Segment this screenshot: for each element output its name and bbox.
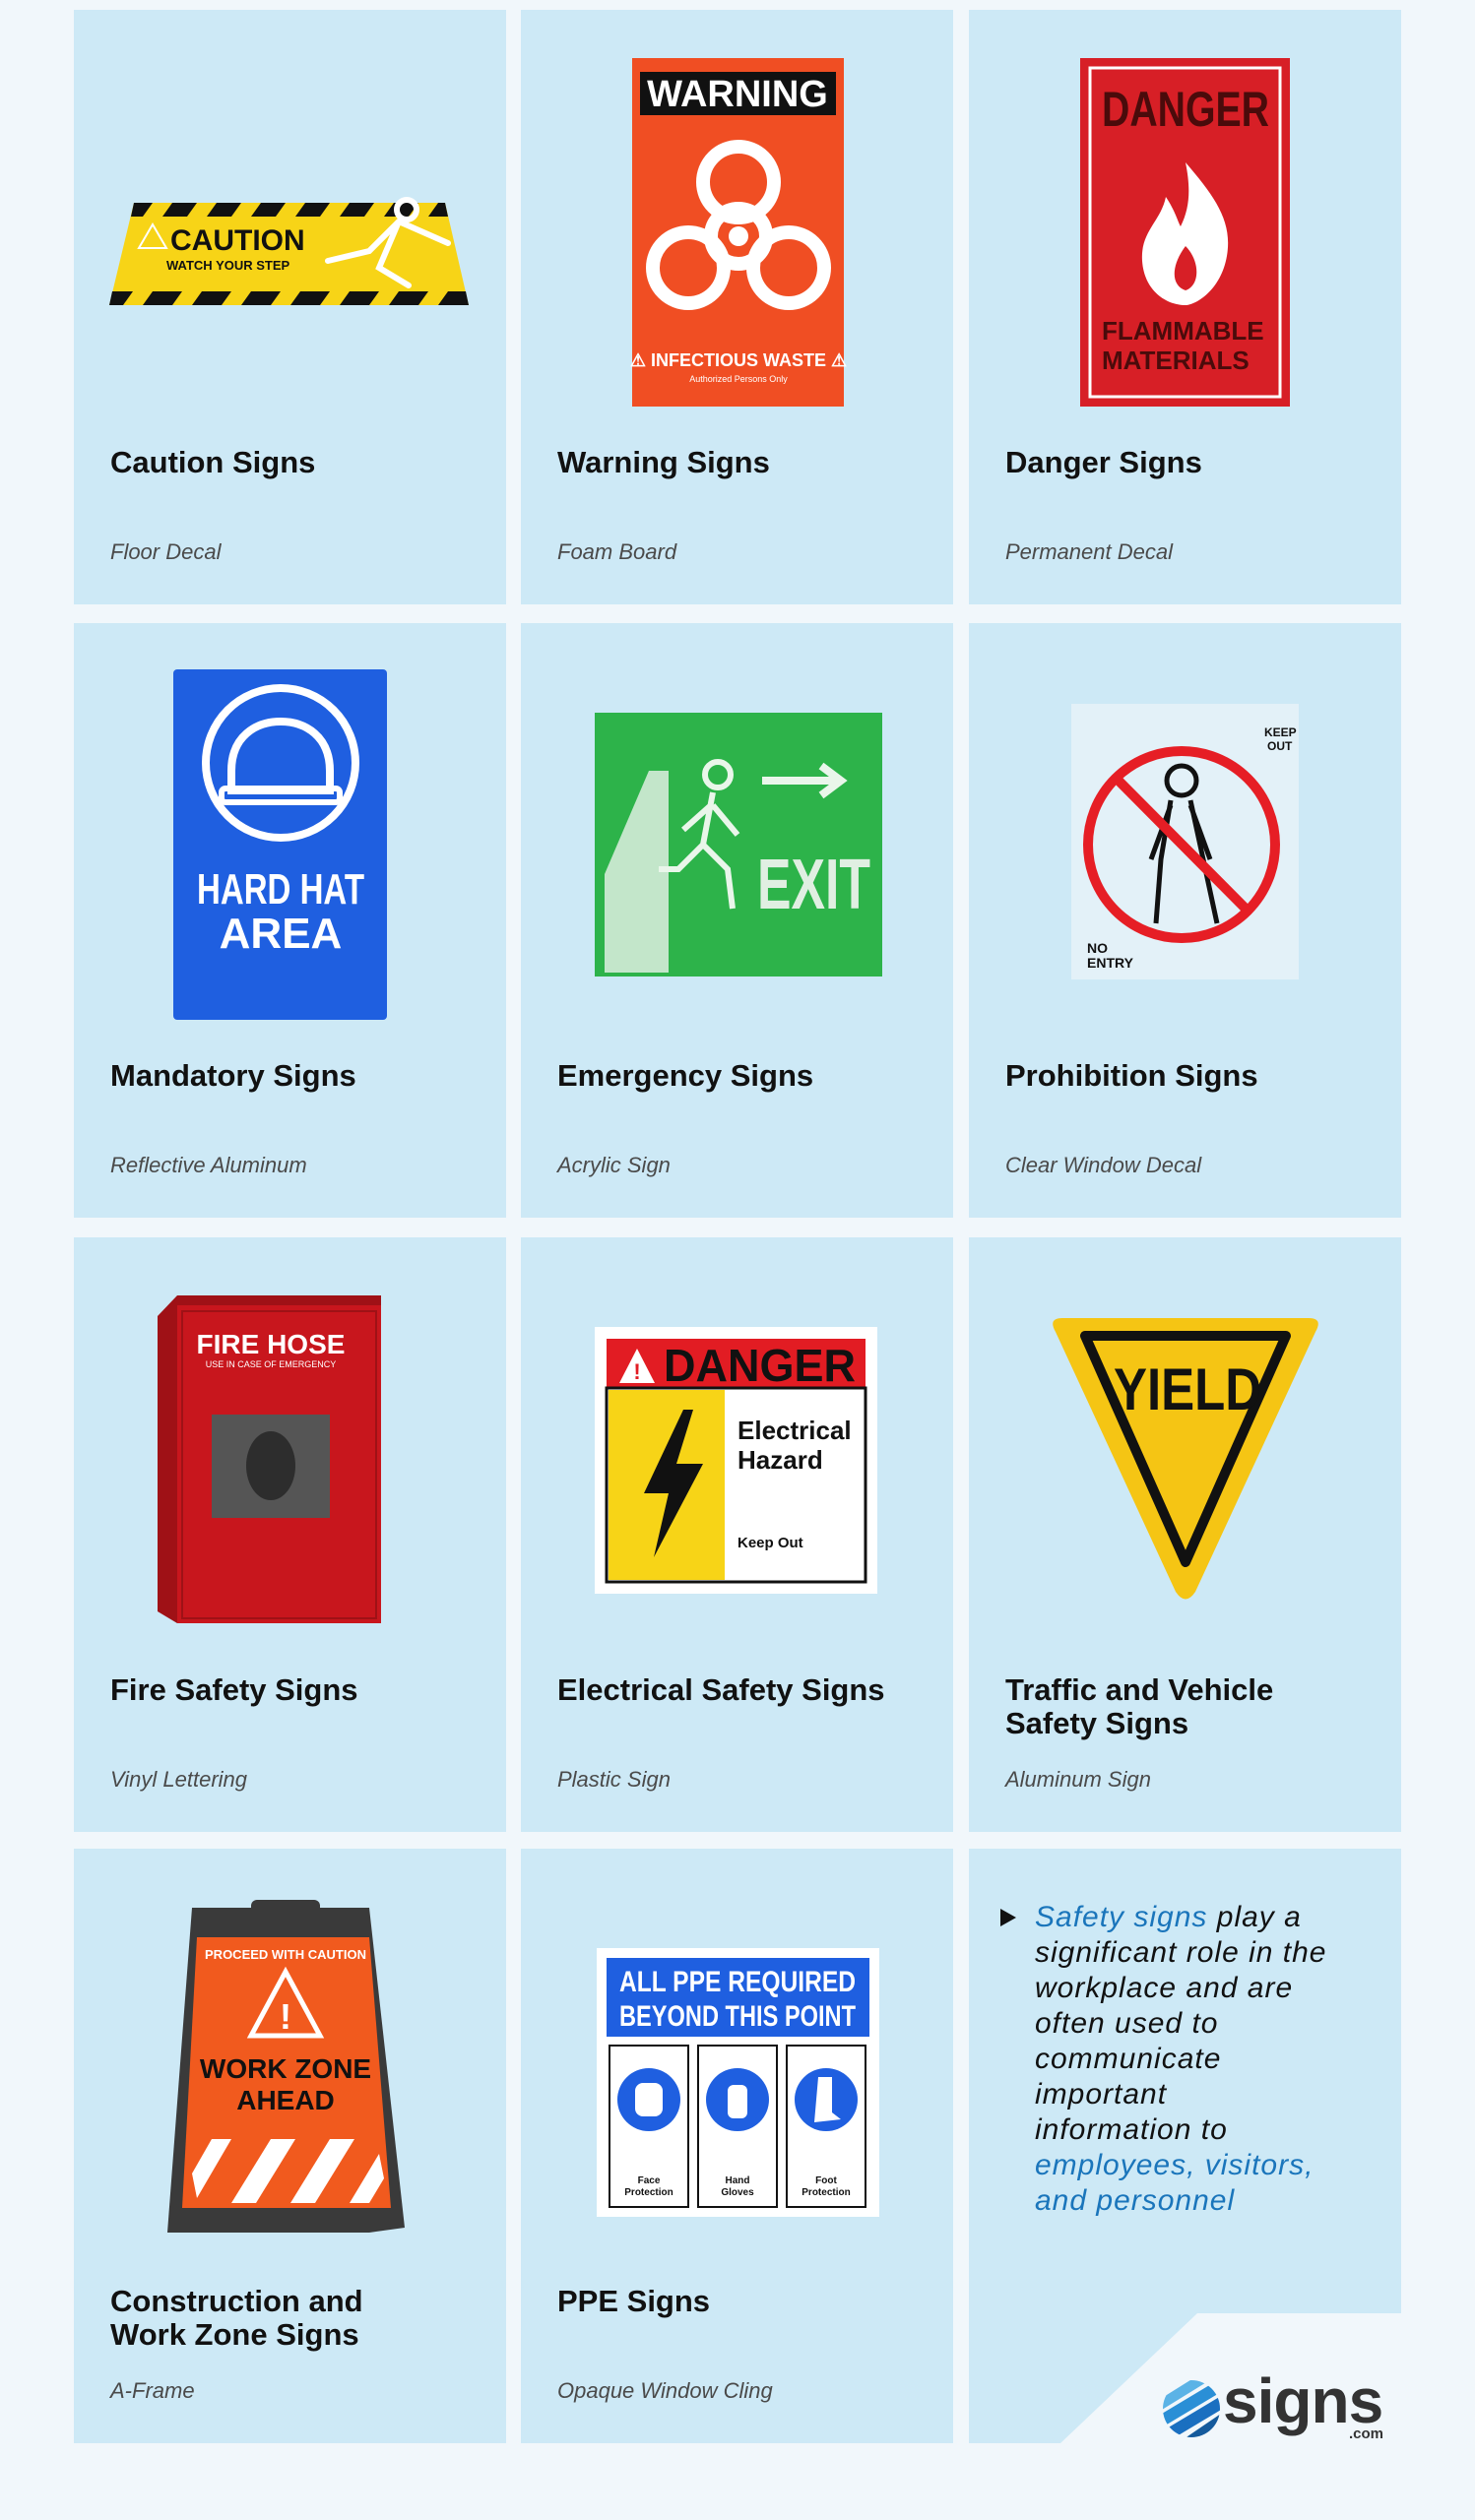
image: hard hat sign: AREA: [220, 910, 342, 958]
image: caution floor decal: WATCH YOUR STEP: [166, 258, 290, 273]
image: danger permanent decal: [1080, 58, 1290, 407]
title: Danger Signs: [1005, 445, 1202, 479]
image: no entry clear decal: OUT: [1267, 739, 1293, 753]
subtitle: Vinyl Lettering: [110, 1767, 247, 1792]
subtitle: Foam Board: [557, 539, 676, 564]
title: Fire Safety Signs: [110, 1672, 358, 1707]
image: yield sign: [1053, 1318, 1318, 1599]
title: Caution Signs: [110, 445, 315, 479]
image: hard hat sign: [173, 669, 387, 1020]
panel: prohibition signs: [969, 623, 1401, 1218]
subtitle: Reflective Aluminum: [110, 1153, 307, 1177]
title: Warning Signs: [557, 445, 770, 479]
image: warning foam board: WARNING: [647, 74, 828, 115]
panel: caution signs: [74, 10, 506, 604]
image: electrical hazard sign: Electrical: [738, 1416, 852, 1445]
title: [1005, 1672, 1273, 1740]
text block: employees, visitors,: [1035, 2149, 1314, 2181]
text block: important: [1035, 2078, 1167, 2110]
image: ppe sign: Face: [638, 2175, 661, 2186]
text block: Safety signs play a: [1035, 1901, 1302, 1933]
image: electrical hazard sign: DANGER: [664, 1340, 856, 1391]
logo: signs.com: signs: [1223, 2365, 1382, 2436]
image: a-frame work zone: AHEAD: [236, 2085, 335, 2115]
logo: signs.com: .com: [1349, 2426, 1383, 2442]
subtitle: Clear Window Decal: [1005, 1153, 1201, 1177]
image: hard hat sign: HARD HAT: [197, 865, 364, 914]
image: electrical hazard sign: Keep Out: [738, 1535, 803, 1551]
image: electrical hazard sign: Hazard: [738, 1445, 823, 1475]
panel: construction signs: [74, 1849, 506, 2443]
title: Prohibition Signs: [1005, 1058, 1258, 1093]
text block: often used to: [1035, 2007, 1218, 2040]
image: caution floor decal: [109, 197, 469, 305]
image: caution floor decal: CAUTION: [170, 224, 305, 257]
text block: communicate: [1035, 2043, 1221, 2075]
image: exit acrylic sign: [595, 713, 882, 976]
panel: mandatory signs: [74, 623, 506, 1218]
panel: electrical safety signs: [521, 1237, 953, 1832]
title: Safety Signs: [1005, 1706, 1188, 1740]
image: fire hose cabinet: FIRE HOSE: [197, 1329, 345, 1359]
image: danger permanent decal: DANGER: [1102, 82, 1269, 137]
subtitle: Plastic Sign: [557, 1767, 671, 1792]
image: ppe sign: Protection: [624, 2187, 673, 2198]
subtitle: Aluminum Sign: [1005, 1767, 1151, 1792]
title: Construction and: [110, 2284, 363, 2318]
title: Traffic and Vehicle: [1005, 1672, 1273, 1707]
image: electrical hazard sign: [595, 1327, 877, 1594]
image: yield sign: YIELD: [1114, 1356, 1261, 1422]
panel: warning signs: [521, 10, 953, 604]
image: electrical hazard sign: !: [633, 1359, 641, 1384]
title: Electrical Safety Signs: [557, 1672, 885, 1707]
panel: emergency signs: [521, 623, 953, 1218]
image: warning foam board: [630, 58, 847, 407]
image: danger permanent decal: MATERIALS: [1102, 346, 1250, 375]
image: warning foam board: ⚠ INFECTIOUS WASTE ⚠: [630, 350, 847, 370]
bullet arrow: [1000, 1909, 1016, 1926]
image: danger permanent decal: FLAMMABLE: [1102, 316, 1264, 346]
image: fire hose cabinet: [158, 1295, 381, 1623]
panel: fire safety signs: [74, 1237, 506, 1832]
panel: danger signs: [969, 10, 1401, 604]
panel: intro text with logo: [969, 1849, 1401, 2443]
subtitle: Opaque Window Cling: [557, 2378, 773, 2403]
logo: signs.com: [1163, 2365, 1383, 2442]
image: no entry clear decal: KEEP: [1264, 725, 1297, 739]
text block: workplace and are: [1035, 1972, 1293, 2004]
image: a-frame work zone: WORK ZONE: [200, 2053, 371, 2084]
subtitle: A-Frame: [110, 2378, 195, 2403]
image: ppe sign: Hand: [725, 2175, 750, 2186]
title: PPE Signs: [557, 2284, 710, 2318]
image: ppe sign: Protection: [802, 2187, 851, 2198]
subtitle: Floor Decal: [110, 539, 221, 564]
image: ppe sign: [597, 1948, 879, 2217]
title: Work Zone Signs: [110, 2317, 359, 2352]
text block: information to: [1035, 2113, 1228, 2146]
text block: [1035, 1901, 1327, 2217]
image: no entry clear decal: [1071, 704, 1299, 979]
image: fire hose cabinet: USE IN CASE OF EMERGENCY: [206, 1359, 336, 1369]
image: ppe sign: Gloves: [721, 2187, 754, 2198]
image: a-frame work zone: [167, 1900, 405, 2233]
image: ppe sign: BEYOND THIS POINT: [619, 2000, 856, 2033]
panel: ppe signs: [521, 1849, 953, 2443]
title: Mandatory Signs: [110, 1058, 356, 1093]
image: ppe sign: Foot: [815, 2175, 837, 2186]
title: Emergency Signs: [557, 1058, 813, 1093]
text block: and personnel: [1035, 2184, 1235, 2217]
image: exit acrylic sign: EXIT: [757, 846, 870, 924]
subtitle: Acrylic Sign: [557, 1153, 671, 1177]
image: warning foam board: Authorized Persons Only: [689, 374, 788, 384]
image: no entry clear decal: NO: [1087, 940, 1108, 956]
text block: significant role in the: [1035, 1936, 1327, 1969]
subtitle: Permanent Decal: [1005, 539, 1173, 564]
title: [110, 2284, 363, 2352]
image: ppe sign: ALL PPE REQUIRED: [619, 1966, 856, 1998]
image: no entry clear decal: ENTRY: [1087, 955, 1134, 971]
image: a-frame work zone: PROCEED WITH CAUTION: [205, 1947, 366, 1962]
panel: traffic signs: [969, 1237, 1401, 1832]
image: a-frame work zone: !: [280, 1996, 291, 2037]
